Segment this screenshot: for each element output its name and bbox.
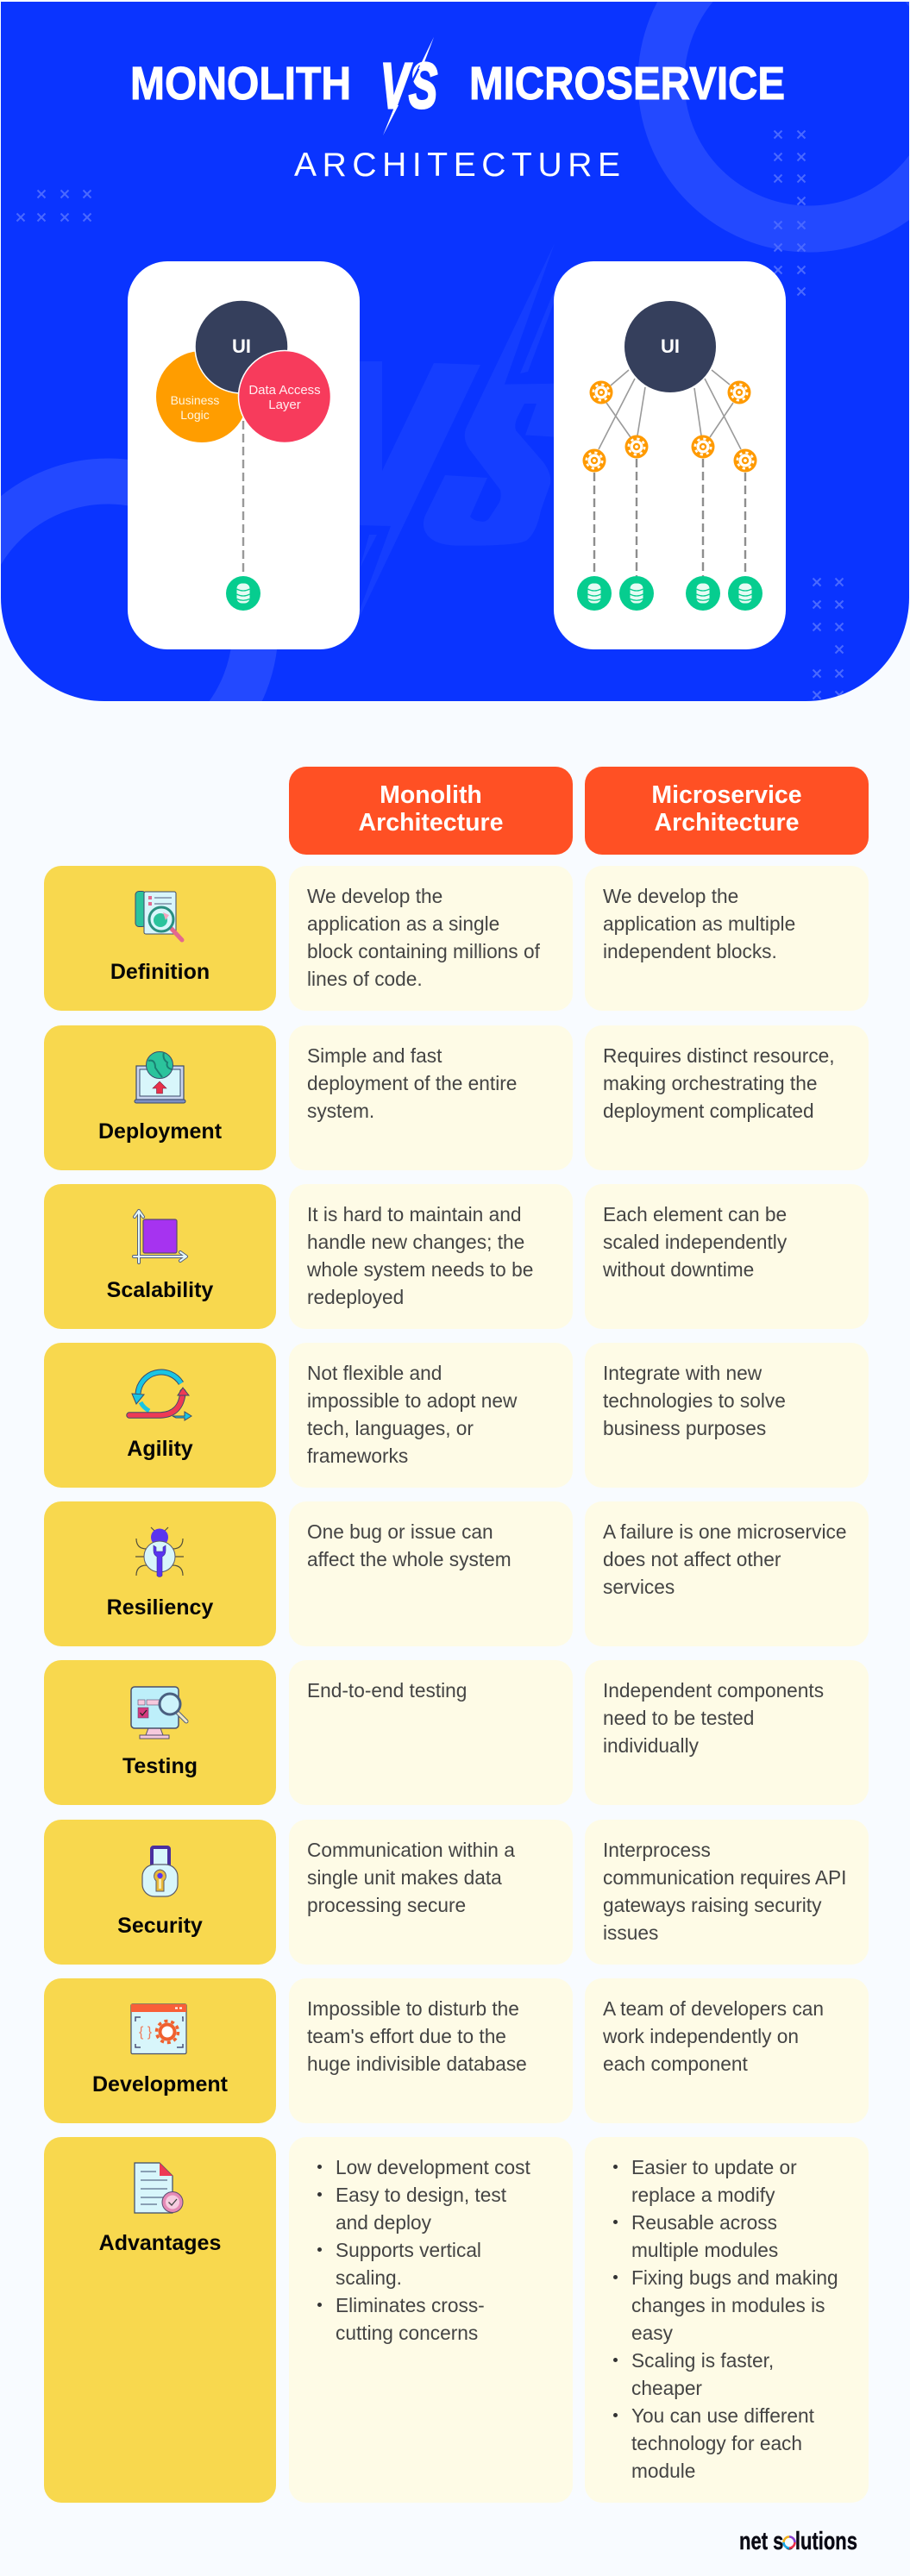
monolith: advantages: scaling. xyxy=(336,2266,402,2289)
microservice: advantages: multiple modules xyxy=(631,2239,778,2261)
monolith: agility: Not flexible and xyxy=(307,1362,442,1384)
microservice: definition: We develop the xyxy=(603,885,738,907)
label: resiliency: Resiliency xyxy=(107,1595,213,1620)
icon: document with magnifier xyxy=(135,891,185,942)
microservice: definition: application as multiple xyxy=(603,912,795,935)
circle: data access layer xyxy=(238,350,331,443)
label: definition: Definition xyxy=(110,960,210,984)
label: testing xyxy=(44,1660,276,1805)
icon: monitor with magnifier xyxy=(130,1686,188,1739)
circle: data access layer: Data Access xyxy=(248,383,321,398)
microservice: resiliency: services xyxy=(603,1576,675,1598)
circle: ui xyxy=(624,301,716,392)
microservice: scalability xyxy=(585,1184,869,1329)
monolith: deployment: deployment of the entire xyxy=(307,1072,517,1094)
microservice: advantages xyxy=(585,2137,869,2503)
microservice: security: communication requires API xyxy=(603,1866,846,1889)
panel: monolith diagram xyxy=(128,261,360,649)
hero header banner xyxy=(1,2,909,701)
row: advantages xyxy=(44,2137,869,2503)
connectors: services to databases xyxy=(594,459,745,576)
monolith: definition: lines of code. xyxy=(307,968,423,990)
monolith: development: huge indivisible database xyxy=(307,2053,527,2075)
monolith: testing: End-to-end testing xyxy=(307,1679,467,1702)
monolith: scalability: redeployed xyxy=(307,1286,404,1308)
microservice: development xyxy=(585,1978,869,2123)
microservice: advantages: Fixing bugs and making xyxy=(631,2266,838,2289)
microservice: agility: business purposes xyxy=(603,1417,766,1439)
circle: ui xyxy=(195,300,288,393)
icon: database xyxy=(226,576,260,611)
monolith: advantages: and deploy xyxy=(336,2211,431,2234)
label: agility xyxy=(44,1343,276,1488)
label: scalability: Scalability xyxy=(107,1278,213,1302)
title: vs badge with lightning: VS xyxy=(380,50,437,122)
microservice: testing: Independent components xyxy=(603,1679,824,1702)
monolith: deployment xyxy=(289,1025,573,1170)
icon: browser window with gear: { } xyxy=(139,2025,153,2040)
microservice: advantages: Scaling is faster, xyxy=(631,2349,774,2372)
microservice: resiliency: A failure is one microservice xyxy=(603,1520,846,1543)
label: development: Development xyxy=(92,2072,228,2097)
microservice: advantages: module xyxy=(631,2460,695,2482)
monolith: scalability: whole system needs to be xyxy=(307,1258,533,1281)
monolith: advantages: Low development cost xyxy=(336,2156,530,2178)
microservice: advantages: Reusable across xyxy=(631,2211,777,2234)
microservice: development: A team of developers can xyxy=(603,1997,824,2020)
monolith: definition xyxy=(289,866,573,1011)
microservice: advantages: cheaper xyxy=(631,2377,702,2399)
circle: business logic: Business xyxy=(171,393,219,407)
icon: bug with wrench xyxy=(135,1526,184,1577)
monolith: agility: impossible to adopt new xyxy=(307,1389,517,1412)
microservice: security: Interprocess xyxy=(603,1839,711,1861)
microservice: deployment: deployment complicated xyxy=(603,1100,814,1122)
icon: agile loop arrows xyxy=(126,1369,192,1421)
row: resiliency xyxy=(44,1501,869,1646)
microservice: scalability: without downtime xyxy=(603,1258,754,1281)
circle: data access layer: Layer xyxy=(268,398,301,412)
circle: business logic: Logic xyxy=(180,408,210,422)
monolith: development xyxy=(289,1978,573,2123)
column heading: monolith: Monolith xyxy=(380,781,482,809)
title: vs badge with lightning xyxy=(380,37,437,135)
watermark VS xyxy=(359,247,554,617)
microservice: agility: technologies to solve xyxy=(603,1389,786,1412)
row: agility xyxy=(44,1343,869,1488)
label: definition xyxy=(44,866,276,1011)
monolith: development: Impossible to disturb the xyxy=(307,1997,519,2020)
microservice: scalability: scaled independently xyxy=(603,1231,787,1253)
microservice: advantages: replace a modify xyxy=(631,2184,775,2206)
icons: service gears xyxy=(583,381,757,473)
microservice: security: issues xyxy=(603,1921,658,1944)
decorative rings xyxy=(1,2,909,701)
microservice: advantages: changes in modules is xyxy=(631,2294,825,2316)
title: microservice: MICROSERVICE xyxy=(469,58,785,110)
monolith: advantages: Easy to design, test xyxy=(336,2184,506,2206)
label: advantages xyxy=(44,2137,276,2503)
icon: padlock xyxy=(141,1846,179,1897)
monolith: advantages xyxy=(289,2137,573,2503)
microservice: deployment: making orchestrating the xyxy=(603,1072,817,1094)
label: development xyxy=(44,1978,276,2123)
monolith: resiliency: affect the whole system xyxy=(307,1548,511,1570)
panel: microservice diagram xyxy=(554,261,786,649)
label: resiliency xyxy=(44,1501,276,1646)
row: security xyxy=(44,1820,869,1965)
microservice: advantages: Easier to update or xyxy=(631,2156,797,2178)
microservice: resiliency xyxy=(585,1501,869,1646)
monolith: scalability xyxy=(289,1184,573,1329)
label: deployment xyxy=(44,1025,276,1170)
circle: ui: UI xyxy=(232,335,251,357)
connectors: ui to services xyxy=(599,370,741,449)
monolith: resiliency: One bug or issue can xyxy=(307,1520,493,1543)
microservice: development: work independently on xyxy=(603,2025,799,2047)
microservice: security: gateways raising security xyxy=(603,1894,821,1916)
icon: browser window with gear xyxy=(130,2003,187,2054)
monolith: advantages: Eliminates cross- xyxy=(336,2294,485,2316)
label: advantages: Advantages xyxy=(99,2231,221,2255)
monolith: definition: We develop the xyxy=(307,885,442,907)
row: development xyxy=(44,1978,869,2123)
monolith: deployment: Simple and fast xyxy=(307,1044,442,1067)
label: security xyxy=(44,1820,276,1965)
microservice: advantages: technology for each xyxy=(631,2432,802,2454)
monolith: advantages: Supports vertical xyxy=(336,2239,481,2261)
microservice: deployment xyxy=(585,1025,869,1170)
column heading: microservice: Architecture xyxy=(655,809,799,837)
microservice: testing: need to be tested xyxy=(603,1707,754,1729)
label: testing: Testing xyxy=(122,1754,198,1778)
row: definition xyxy=(44,866,869,1011)
icon: laptop with globe xyxy=(135,1051,186,1104)
microservice: agility xyxy=(585,1343,869,1488)
decorative x marks xyxy=(17,131,844,699)
column heading: microservice xyxy=(585,767,869,855)
monolith: security xyxy=(289,1820,573,1965)
label: agility: Agility xyxy=(127,1437,193,1461)
column heading: monolith: Architecture xyxy=(359,809,503,837)
microservice: advantages: You can use different xyxy=(631,2404,814,2427)
monolith: definition: block containing millions of xyxy=(307,940,540,962)
microservice: advantages: easy xyxy=(631,2322,673,2344)
label: scalability xyxy=(44,1184,276,1329)
monolith: agility: tech, languages, or xyxy=(307,1417,474,1439)
microservice: deployment: Requires distinct resource, xyxy=(603,1044,835,1067)
title: monolith: MONOLITH xyxy=(130,58,351,110)
monolith: definition: application as a single xyxy=(307,912,499,935)
microservice: scalability: Each element can be xyxy=(603,1203,787,1225)
microservice: security xyxy=(585,1820,869,1965)
microservice: definition xyxy=(585,866,869,1011)
monolith: security: Communication within a xyxy=(307,1839,515,1861)
column heading: monolith xyxy=(289,767,573,855)
monolith: scalability: It is hard to maintain and xyxy=(307,1203,521,1225)
monolith: agility: frameworks xyxy=(307,1445,408,1467)
icon: document with check badge xyxy=(134,2162,183,2214)
monolith: agility xyxy=(289,1343,573,1488)
connector: dashed line to database xyxy=(242,421,244,576)
monolith: development: team's effort due to the xyxy=(307,2025,506,2047)
subtitle: architecture: ARCHITECTURE xyxy=(294,147,620,184)
icon: scaling square with axes xyxy=(132,1209,188,1264)
row: deployment xyxy=(44,1025,869,1170)
column heading: microservice: Microservice xyxy=(651,781,802,809)
microservice: development: each component xyxy=(603,2053,748,2075)
circle: ui: UI xyxy=(661,335,680,357)
microservice: agility: Integrate with new xyxy=(603,1362,762,1384)
microservice: testing: individually xyxy=(603,1734,699,1757)
monolith: resiliency xyxy=(289,1501,573,1646)
label: deployment: Deployment xyxy=(98,1119,222,1144)
monolith: testing xyxy=(289,1660,573,1805)
row: scalability xyxy=(44,1184,869,1329)
icons: databases xyxy=(577,576,763,611)
monolith: advantages: cutting concerns xyxy=(336,2322,478,2344)
microservice: testing xyxy=(585,1660,869,1805)
monolith: scalability: handle new changes; the xyxy=(307,1231,524,1253)
monolith: security: processing secure xyxy=(307,1894,466,1916)
microservice: resiliency: does not affect other xyxy=(603,1548,781,1570)
monolith: deployment: system. xyxy=(307,1100,374,1122)
label: security: Security xyxy=(117,1914,203,1938)
circle: business logic xyxy=(156,351,248,442)
microservice: definition: independent blocks. xyxy=(603,940,777,962)
monolith: security: single unit makes data xyxy=(307,1866,502,1889)
row: testing xyxy=(44,1660,869,1805)
